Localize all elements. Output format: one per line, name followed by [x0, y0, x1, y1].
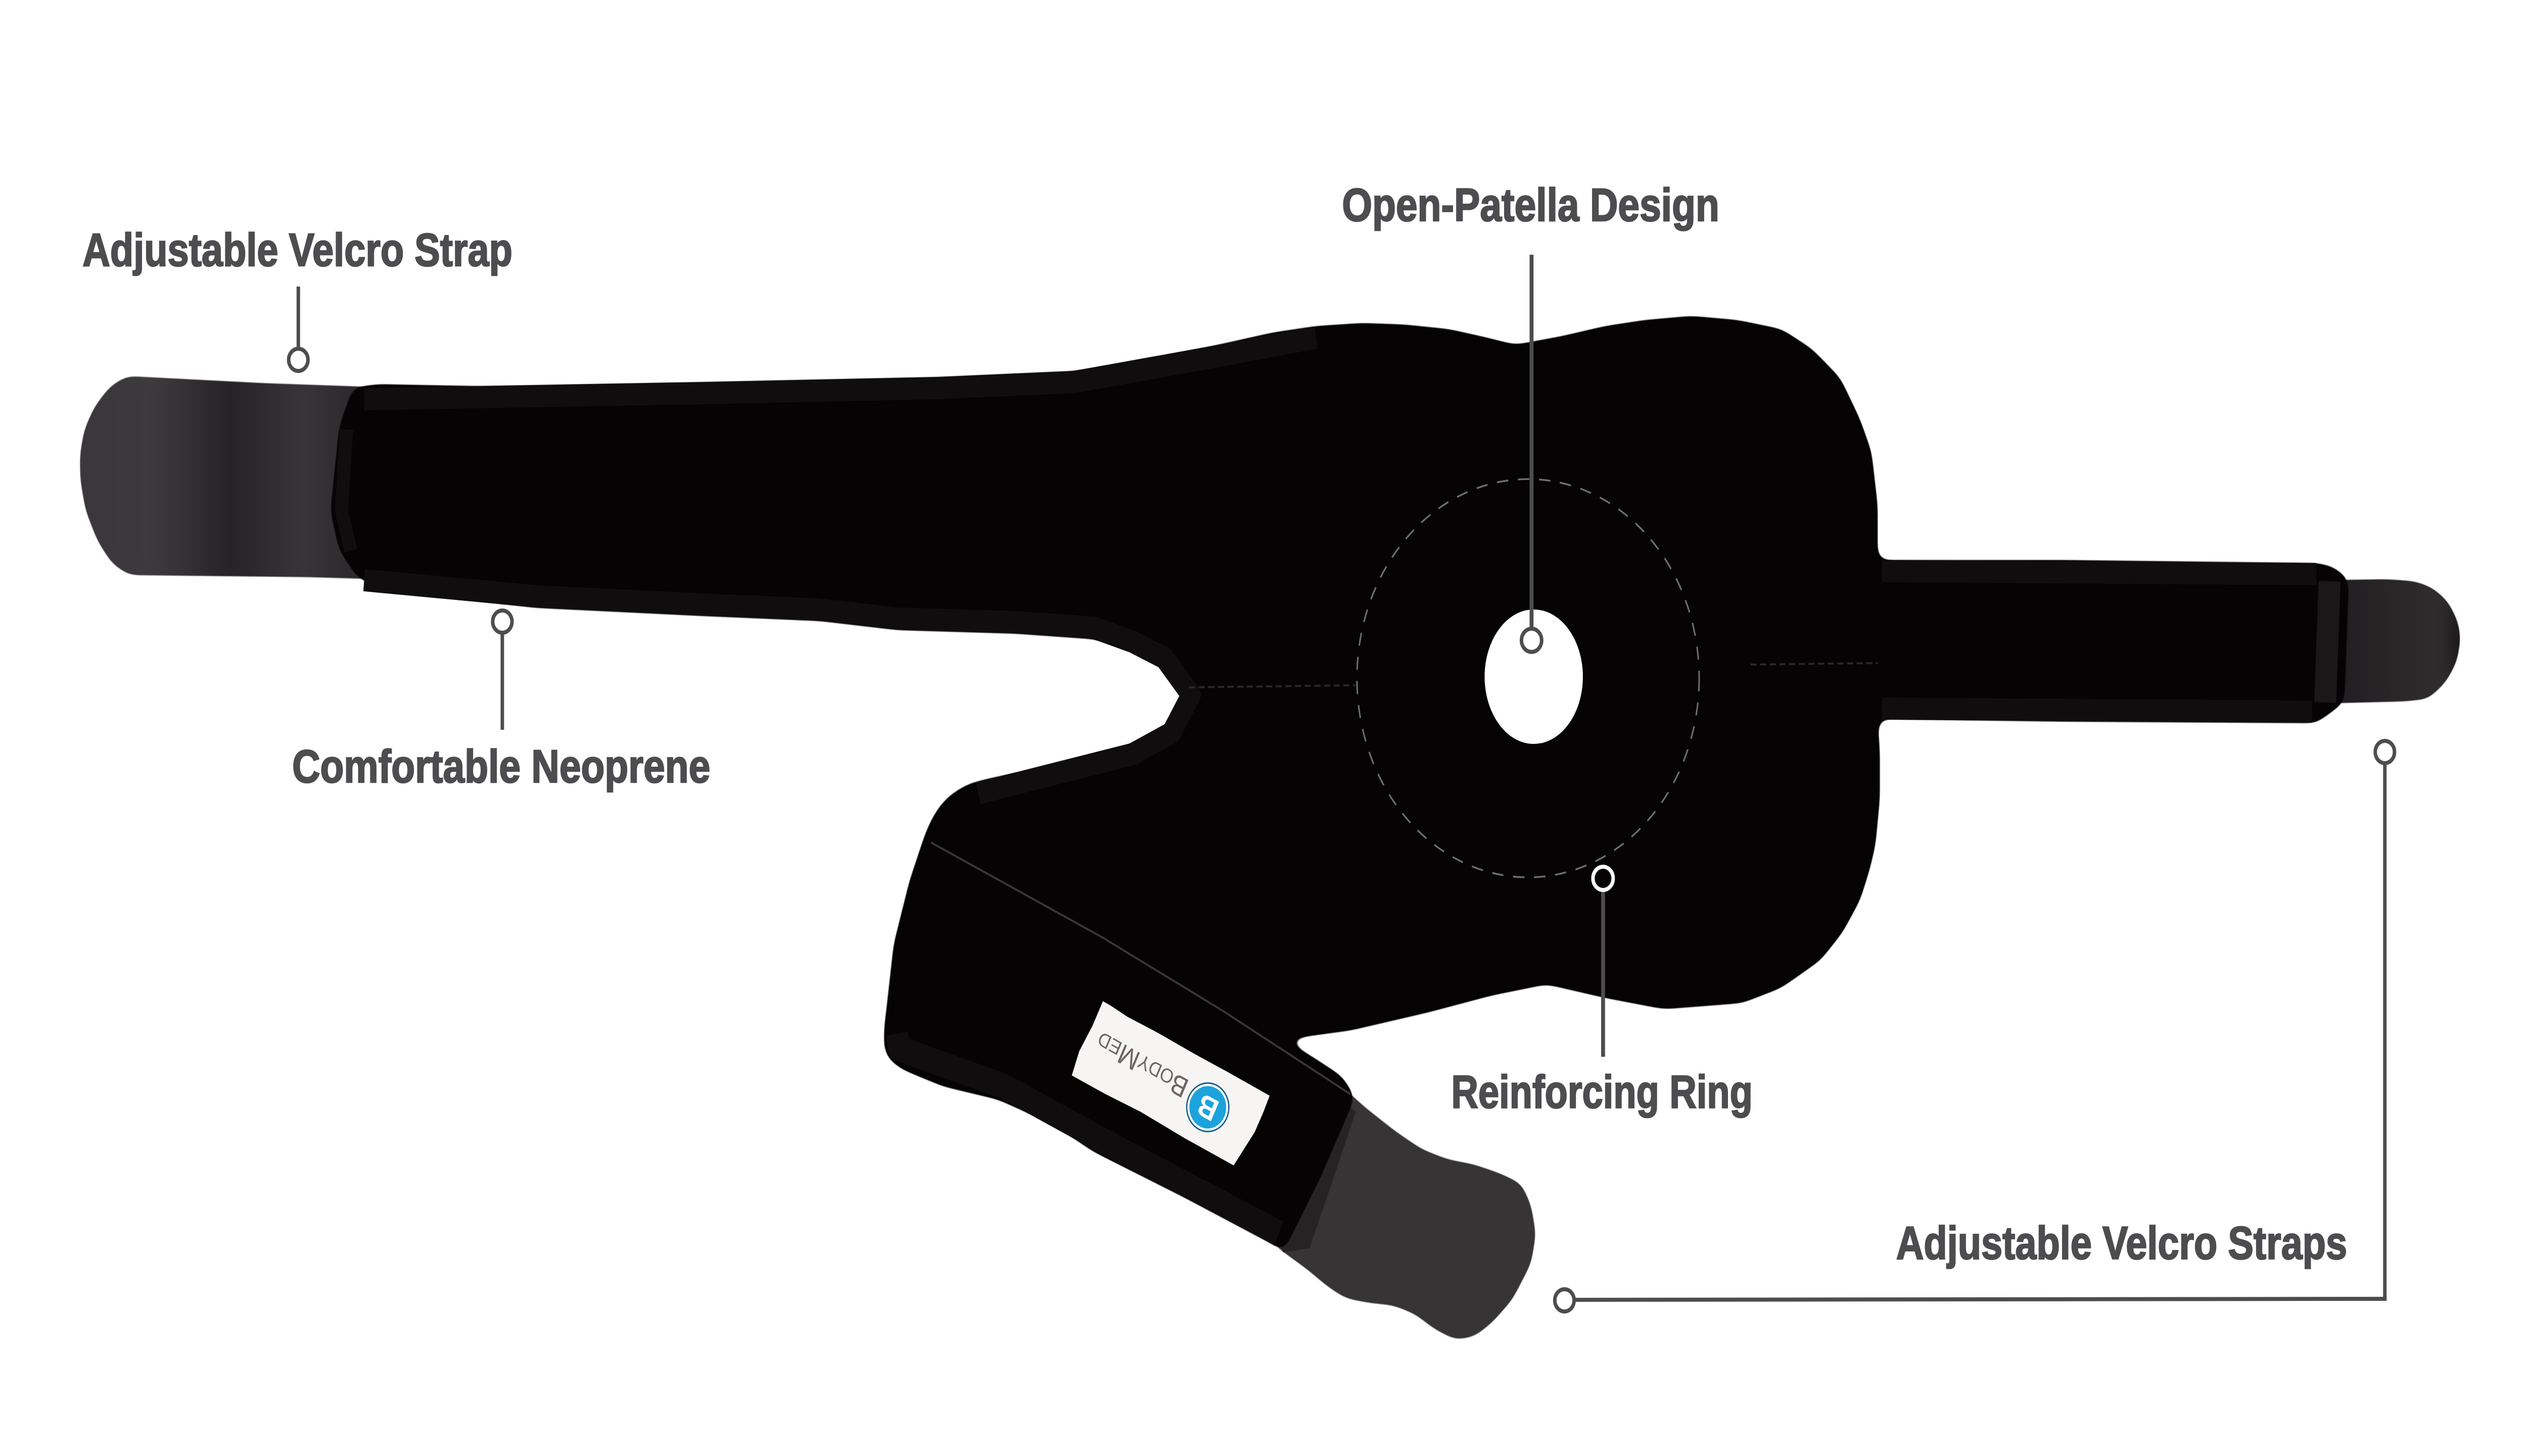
logo circle: B — [1192, 1087, 1223, 1128]
reinforcing ring stitching — [1357, 479, 1699, 877]
lower velcro tab — [1264, 1087, 1536, 1340]
right velcro tab — [2325, 579, 2461, 703]
callout: Comfortable Neoprene: Comfortable Neoprene — [292, 741, 710, 792]
open patella hole — [1485, 609, 1583, 744]
brand name: BodyMed — [1092, 1025, 1193, 1103]
callout: Open-Patella Design: Open-Patella Design — [1342, 179, 1719, 231]
lower strap fold seam — [931, 842, 1350, 1094]
callout: Comfortable Neoprene — [292, 610, 710, 792]
brand label: BodyMed — [1072, 1001, 1270, 1165]
logo circle — [1187, 1083, 1229, 1132]
knee brace product — [80, 316, 2461, 1340]
callout: Adjustable Velcro Straps — [1555, 741, 2395, 1311]
callout: Adjustable Velcro Strap: Adjustable Velcro Strap — [82, 224, 512, 276]
callout: Reinforcing Ring — [1452, 867, 1753, 1118]
callout: Open-Patella Design — [1342, 179, 1719, 652]
left velcro tab — [80, 376, 378, 579]
strap edge binding — [341, 338, 2329, 1233]
callout: Adjustable Velcro Strap — [82, 224, 512, 371]
callout: Adjustable Velcro Straps: Adjustable Velcro Straps — [1896, 1217, 2347, 1269]
horizontal stitching — [1189, 663, 1878, 687]
neoprene body and straps — [331, 316, 2349, 1252]
callout: Reinforcing Ring: Reinforcing Ring — [1452, 1066, 1753, 1118]
